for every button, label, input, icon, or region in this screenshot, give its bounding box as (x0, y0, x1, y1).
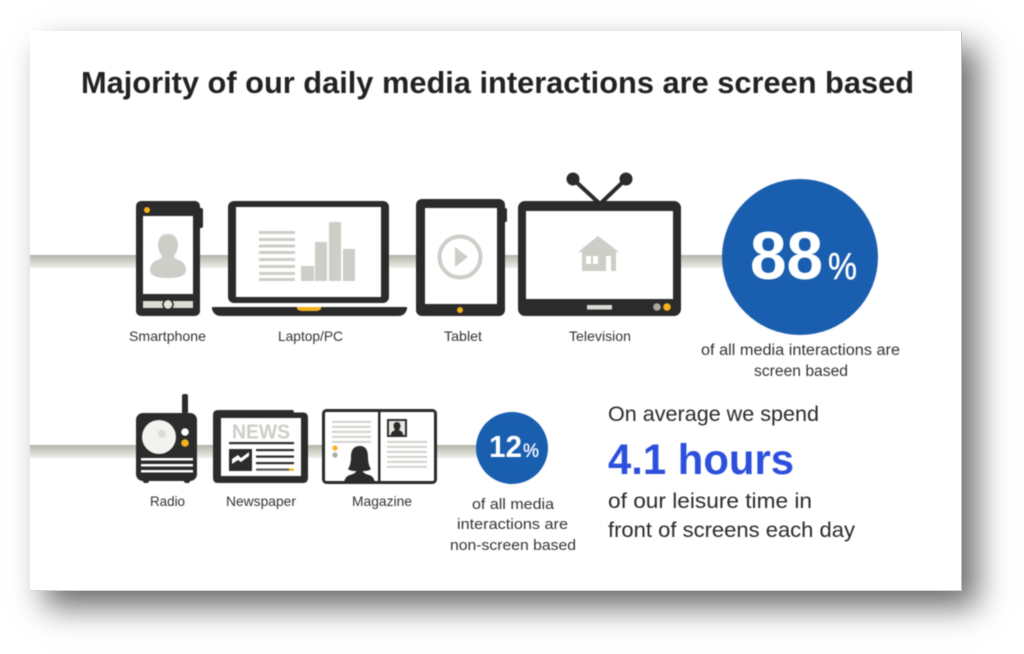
label: Laptop/PC: Laptop/PC (278, 328, 343, 344)
caption: 88% of media interactions (701, 342, 900, 380)
stat circle: 12%: % (523, 441, 539, 462)
icon: radio (136, 394, 197, 483)
callout: 4.1 hours of leisure time: of our leisure time in (608, 489, 812, 513)
icon: newspaper: NEWS (232, 422, 290, 444)
caption: 12% of media interactions: of all media (472, 496, 555, 513)
callout: 4.1 hours of leisure time (608, 402, 855, 542)
icon: tablet (416, 199, 507, 316)
caption: 12% of media interactions (450, 496, 576, 554)
icon: newspaper (213, 410, 308, 483)
callout: 4.1 hours of leisure time: 4.1 hours (608, 436, 794, 484)
stat circle: 88%: % (828, 246, 857, 288)
caption: 12% of media interactions: non-screen based (450, 537, 576, 554)
caption: 88% of media interactions: screen based (754, 363, 848, 380)
slide card with drop shadow (30, 31, 962, 591)
callout: 4.1 hours of leisure time: front of screens each day (608, 518, 855, 542)
callout: 4.1 hours of leisure time: On average we spend (608, 402, 819, 426)
label: Television: Television (569, 328, 631, 344)
stat circle: 88%: 88 (750, 218, 823, 294)
stat circle: 12%: 12 (489, 429, 522, 464)
timeline bar: screen media (30, 255, 730, 268)
icon: laptop (212, 201, 407, 316)
caption: 12% of media interactions: interactions are (457, 516, 568, 533)
label: Radio: Radio (150, 493, 185, 509)
stat circle: 12% (476, 412, 548, 484)
icon: smartphone (136, 201, 203, 316)
label: Newspaper: Newspaper (226, 493, 296, 509)
icon: magazine (324, 410, 436, 483)
label: Smartphone: Smartphone (129, 328, 206, 344)
caption: 88% of media interactions: of all media interactions are (701, 342, 900, 359)
icon: television (518, 172, 681, 316)
label: Magazine: Magazine (352, 493, 412, 509)
stat circle: 88% (722, 179, 878, 335)
timeline bar: non-screen media (30, 445, 490, 458)
title: Majority of our daily media interactions are screen based (81, 65, 914, 100)
label: Tablet: Tablet (444, 328, 482, 344)
